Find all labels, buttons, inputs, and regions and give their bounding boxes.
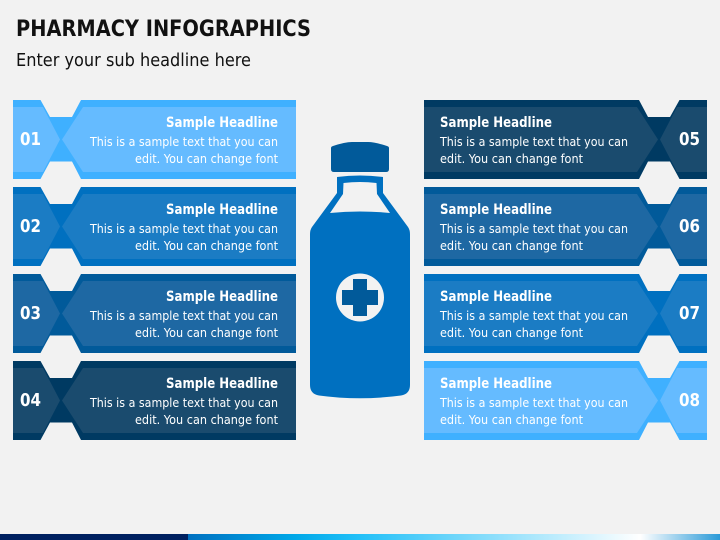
panel: item 04: edit. You can change font xyxy=(135,412,278,427)
panel: item 01: 01 xyxy=(20,129,41,150)
panel: item 05: 05 xyxy=(679,129,700,150)
panel: item 04 xyxy=(13,361,296,440)
panel: item 07: Sample Headline xyxy=(440,289,552,305)
panel: item 02: edit. You can change font xyxy=(135,238,278,253)
panel: item 02 xyxy=(13,187,296,266)
subtitle: Enter your sub headline here xyxy=(16,51,251,71)
panel: item 05: This is a sample text that you can xyxy=(439,134,628,149)
medical cross xyxy=(342,279,378,316)
panel: item 07 xyxy=(424,274,707,353)
title: PHARMACY INFOGRAPHICS xyxy=(16,17,311,42)
panel: item 01: This is a sample text that you can xyxy=(89,134,278,149)
panel: item 05: Sample Headline xyxy=(440,115,552,131)
panel: item 04: This is a sample text that you can xyxy=(89,395,278,410)
panel: item 07: 07 xyxy=(679,303,700,324)
panel: item 02: Sample Headline xyxy=(166,202,278,218)
panel: item 03 xyxy=(13,274,296,353)
panel: item 05: edit. You can change font xyxy=(440,151,583,166)
panel: item 01 xyxy=(13,100,296,179)
panel: item 05 xyxy=(424,100,707,179)
footer bar xyxy=(0,534,720,540)
icon: medicine bottle xyxy=(310,142,410,398)
panel: item 02: This is a sample text that you can xyxy=(89,221,278,236)
panel: item 01: Sample Headline xyxy=(166,115,278,131)
panel: item 08: Sample Headline xyxy=(440,376,552,392)
panel: item 01: edit. You can change font xyxy=(135,151,278,166)
panel: item 03: 03 xyxy=(20,303,41,324)
panel: item 08: edit. You can change font xyxy=(440,412,583,427)
panel: item 06: edit. You can change font xyxy=(440,238,583,253)
panel: item 07: This is a sample text that you can xyxy=(439,308,628,323)
bottle cap xyxy=(331,142,389,172)
panel: item 08: 08 xyxy=(679,390,700,411)
panel: item 04: 04 xyxy=(20,390,41,411)
panel: item 06 xyxy=(424,187,707,266)
bottle body xyxy=(310,176,410,398)
panel: item 06: 06 xyxy=(679,216,700,237)
panel: item 06: This is a sample text that you can xyxy=(439,221,628,236)
panel: item 08: This is a sample text that you can xyxy=(439,395,628,410)
label circle xyxy=(336,274,384,322)
panel: item 03: edit. You can change font xyxy=(135,325,278,340)
panel: item 03: This is a sample text that you can xyxy=(89,308,278,323)
bottle window xyxy=(330,182,390,213)
panel: item 06: Sample Headline xyxy=(440,202,552,218)
panel: item 03: Sample Headline xyxy=(166,289,278,305)
panel: item 04: Sample Headline xyxy=(166,376,278,392)
panel: item 07: edit. You can change font xyxy=(440,325,583,340)
panel: item 02: 02 xyxy=(20,216,41,237)
panel: item 08 xyxy=(424,361,707,440)
